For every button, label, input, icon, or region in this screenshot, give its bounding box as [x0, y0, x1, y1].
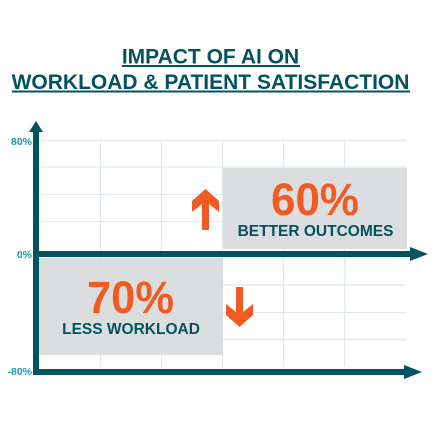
- stat: 60%: 60%: [271, 174, 359, 225]
- panel: better outcomes: [223, 168, 407, 249]
- label: less workload: LESS WORKLOAD: [62, 321, 200, 338]
- title: WORKLOAD & PATIENT SATISFACTION: [12, 71, 409, 94]
- icon: down arrow: [226, 287, 253, 327]
- label: better outcomes: BETTER OUTCOMES: [238, 223, 393, 240]
- y axis labels: 0%: [17, 249, 33, 261]
- panel: less workload: [39, 258, 223, 355]
- zero axis arrow: [33, 247, 428, 261]
- y axis labels: 80%: [11, 136, 33, 148]
- icon: up arrow: [192, 189, 219, 230]
- title: IMPACT OF AI ON: [122, 46, 299, 68]
- bottom axis arrow: [33, 365, 422, 379]
- stat: 70%: 70%: [87, 272, 174, 323]
- title: [12, 46, 410, 94]
- y axis labels: [7, 136, 33, 378]
- y axis: [29, 121, 43, 375]
- y axis labels: -80%: [7, 366, 33, 378]
